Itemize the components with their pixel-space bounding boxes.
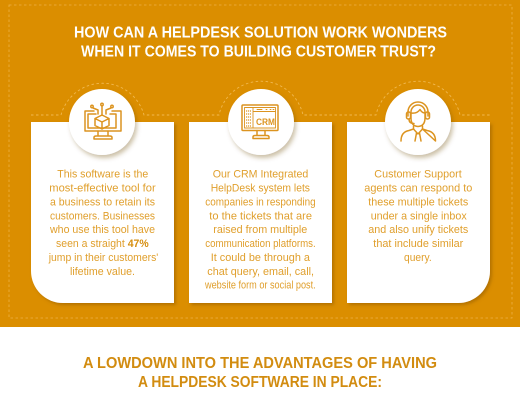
title: WHEN IT COMES TO BUILDING CUSTOMER TRUST? xyxy=(81,44,436,60)
card 3 body text: query. xyxy=(404,252,432,264)
bottom heading: A HELPDESK SOFTWARE IN PLACE: xyxy=(138,374,382,391)
card 1 body text: customers. Businesses xyxy=(50,210,155,222)
card 2 body text: website form or social post. xyxy=(204,280,316,292)
card 3 body text: under a single inbox xyxy=(371,210,467,222)
card 1 body text: most-effective tool for xyxy=(49,182,156,194)
card 1 background xyxy=(31,122,174,303)
bottom heading xyxy=(83,355,437,391)
card 2 body text: raised from multiple xyxy=(213,224,307,236)
panel: card 2 xyxy=(189,122,332,303)
card 1 body text: lifetime value. xyxy=(70,266,135,278)
card 1 body text: seen a straight 47% xyxy=(56,238,149,250)
card 3 body text: these multiple tickets xyxy=(368,196,469,208)
card 2 body text: companies in responding xyxy=(205,196,316,208)
card 3 body text: Customer Support xyxy=(374,168,462,180)
card 3 body text: agents can respond to xyxy=(364,182,472,194)
card 2 body text: chat query, email, call, xyxy=(207,266,314,278)
card 2 body text: It could be through a xyxy=(211,252,311,264)
icon: software cube on monitor xyxy=(69,89,135,155)
card 3 body text: that include similar xyxy=(373,238,464,250)
card 2 background xyxy=(189,122,332,303)
card 2 body text: HelpDesk system lets xyxy=(211,182,310,194)
icon: CRM monitor: CRM xyxy=(256,117,275,127)
panel: card 1 xyxy=(31,122,174,303)
card 2 body text: communication platforms. xyxy=(205,238,316,250)
icon: support agent with headset xyxy=(385,89,451,155)
card 1 body text: a business to retain its xyxy=(50,196,155,208)
orange background panel xyxy=(0,0,520,327)
card 1 body text xyxy=(48,168,158,278)
card 1 body text: jump in their customers' xyxy=(48,252,158,264)
title xyxy=(74,24,447,60)
card 3 body text xyxy=(364,168,472,264)
card 1 body text: who use this tool have xyxy=(49,224,155,236)
dashed outer border xyxy=(9,5,512,318)
icon: CRM monitor xyxy=(228,89,294,155)
card 3 background xyxy=(347,122,490,303)
panel: card 3 xyxy=(347,122,490,303)
card 3 body text: and also unify tickets xyxy=(368,224,469,236)
dashed connector with arcs xyxy=(31,81,490,115)
card 2 body text xyxy=(204,168,316,292)
title: HOW CAN A HELPDESK SOLUTION WORK WONDERS xyxy=(74,24,447,42)
card 1 body text: This software is the xyxy=(57,168,148,180)
card 2 body text: Our CRM Integrated xyxy=(213,168,308,180)
bottom heading: A LOWDOWN INTO THE ADVANTAGES OF HAVING xyxy=(83,355,437,372)
card 2 body text: to the tickets that are xyxy=(209,210,312,222)
